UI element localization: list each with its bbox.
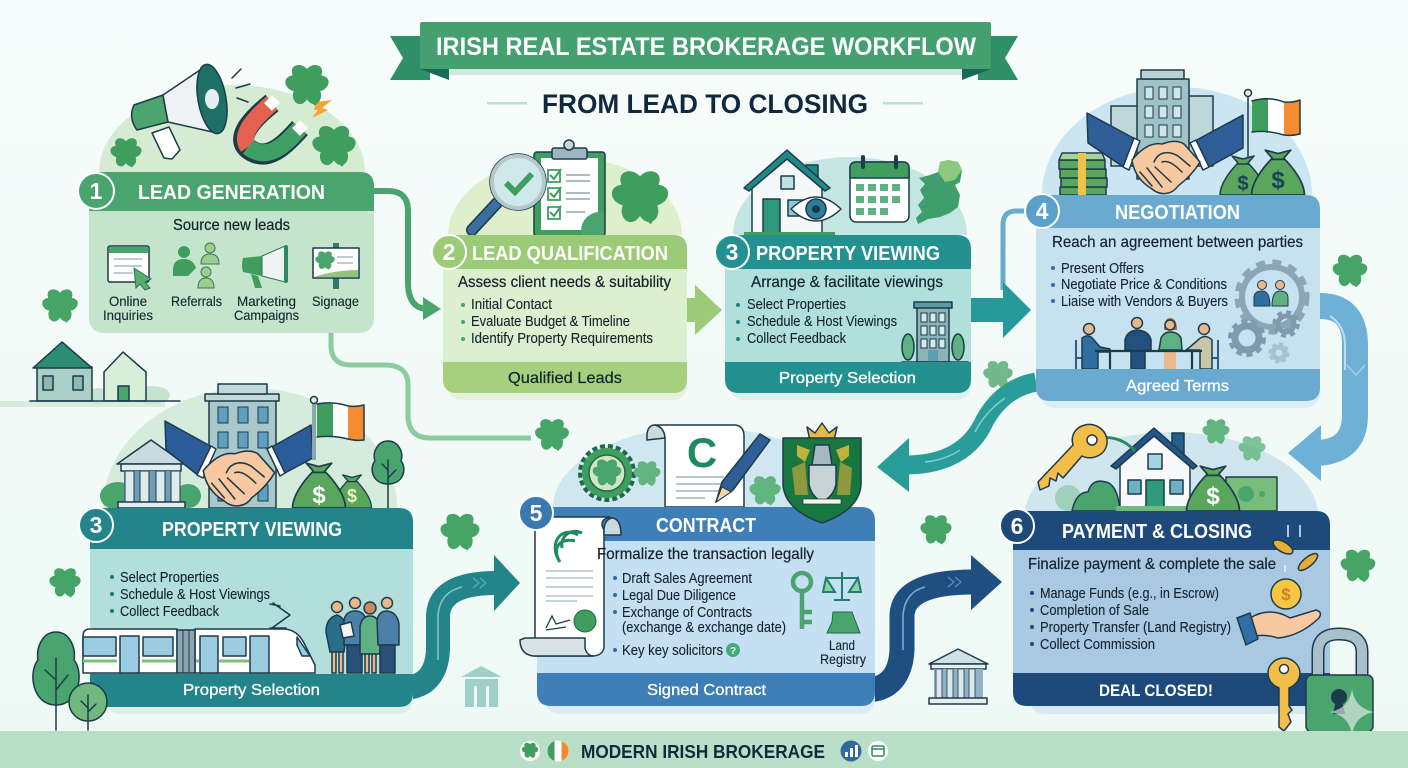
icon: signage [312, 243, 359, 309]
dome backdrop [1025, 432, 1318, 511]
icon: cash stack [1059, 153, 1107, 195]
bullet list: Collect Feedback [747, 330, 846, 347]
panel body [537, 507, 875, 706]
panel: contract [519, 423, 875, 714]
icon: group of people [326, 598, 399, 673]
panel header [1036, 195, 1320, 228]
icon: Irish flag badge [547, 740, 569, 762]
icon: crest shield with harp [783, 423, 861, 523]
arrow: property viewing to contract [405, 555, 520, 688]
icon: handshake [165, 421, 313, 506]
icon: gold key [1268, 658, 1300, 731]
icon: online inquiries [103, 246, 153, 323]
panel body [89, 172, 374, 333]
icon: land registry: Land [829, 637, 855, 653]
panel footer: Property Selection [183, 682, 320, 699]
bullet list: Negotiate Price & Conditions [1061, 276, 1227, 293]
step badge 6: 6 [1011, 513, 1023, 539]
dome backdrop [1042, 87, 1312, 195]
icon: handshake [1087, 113, 1243, 194]
footer label: MODERN IRISH BROKERAGE [581, 741, 825, 762]
icon: meeting table [1076, 318, 1218, 369]
bullet list: Identify Property Requirements [471, 330, 653, 347]
bullet list: Initial Contact [471, 296, 553, 313]
icon: courthouse [100, 440, 201, 510]
arrow: property viewing to negotiation [971, 211, 1031, 338]
panel footer [537, 673, 875, 706]
bullet list [1030, 585, 1231, 653]
bullet list: Select Properties [747, 296, 846, 313]
description: Arrange & facilitate viewings [751, 274, 943, 291]
panel footer [1036, 369, 1320, 401]
bullet list [613, 570, 786, 659]
bullet list: Legal Due Diligence [622, 587, 736, 604]
description: Assess client needs & suitability [458, 274, 671, 291]
icon: calendar [850, 157, 909, 222]
step badge 5: 5 [530, 500, 543, 526]
icon: tram [83, 603, 315, 673]
icon: shamrocks [632, 461, 782, 506]
panel body [1013, 511, 1330, 706]
panel: lead generation [78, 62, 374, 333]
panel header [1013, 511, 1330, 550]
bullet list: (exchange & exchange date) [622, 619, 786, 636]
arrow: negotiation to contract [877, 382, 1036, 492]
panel: payment and closing [1000, 419, 1374, 736]
panel body [443, 235, 687, 393]
title banner [390, 22, 1018, 80]
bullet list: Completion of Sale [1040, 602, 1149, 619]
step badge 2: 2 [443, 239, 455, 265]
panel: negotiation [1025, 70, 1320, 408]
icon: gold key with ring [1038, 424, 1135, 490]
description: Finalize payment & complete the sale [1028, 556, 1276, 573]
panel shadow [447, 250, 687, 400]
bullet list [461, 296, 653, 347]
panel body [725, 235, 971, 393]
icon: marketing campaigns: Campaigns [234, 307, 299, 323]
bullet list: Key key solicitors [622, 642, 723, 659]
icon: online inquiries: Inquiries [103, 307, 153, 323]
icon: money bags: $ [347, 486, 357, 506]
panel shadow [105, 520, 413, 714]
icon: gears with partners [1230, 262, 1307, 362]
icon: small houses [0, 342, 180, 407]
icon: Irish flag [1244, 90, 1300, 165]
icon: document with pen: C [687, 429, 717, 476]
panel header [89, 172, 374, 211]
dome backdrop [103, 388, 397, 508]
step badge 3 [79, 508, 113, 542]
panel shadow [1030, 520, 1330, 714]
icon: hand with coins [1237, 525, 1320, 645]
icon: shamrocks [1201, 419, 1267, 462]
arrow: negotiation to payment and closing [1288, 306, 1365, 481]
panel: property viewing (top) [715, 150, 971, 400]
icon: money bags: $ [1237, 173, 1249, 195]
icon: Irish flag [310, 396, 364, 460]
panel shadow [545, 520, 875, 714]
icon: calendar badge [868, 741, 888, 761]
step badge 6 [1000, 509, 1034, 543]
icon: green seal [580, 446, 634, 500]
description: Reach an agreement between parties [1052, 234, 1303, 251]
icon: signage: Signage [312, 293, 359, 309]
bullet list: Collect Feedback [120, 603, 219, 620]
step badge 4: 4 [1036, 198, 1049, 224]
icon: megaphone [132, 62, 250, 159]
panel: lead qualification [432, 140, 687, 400]
icon: land registry [820, 612, 866, 667]
step badge 3: 3 [726, 239, 738, 265]
dome backdrop [733, 157, 967, 235]
subtitle: FROM LEAD TO CLOSING [542, 89, 868, 119]
panel footer: Qualified Leads [508, 370, 622, 387]
footer bar [0, 731, 1408, 768]
step badge 4 [1025, 194, 1059, 228]
icon: referrals [171, 243, 222, 309]
step badge 2 [432, 235, 466, 269]
bullet list [736, 296, 897, 347]
panel header [90, 508, 413, 549]
bullet list: Property Transfer (Land Registry) [1040, 619, 1231, 636]
step badge 1: 1 [90, 178, 103, 204]
bullet list: Schedule & Host Viewings [747, 313, 897, 330]
icon: online inquiries: Online [109, 293, 147, 309]
panel footer [443, 362, 687, 393]
panel footer: Agreed Terms [1126, 378, 1229, 395]
icon: shamrock badge [520, 741, 540, 761]
bullet list: ? [730, 646, 736, 657]
panel: property viewing (bottom) [33, 384, 413, 730]
icon: referrals: Referrals [171, 293, 222, 309]
icon: apartment building [902, 302, 968, 362]
panel header: PAYMENT & CLOSING [1062, 521, 1252, 543]
panel header [725, 235, 971, 269]
icon: money bags [1220, 150, 1304, 195]
panel body [90, 508, 413, 707]
panel header [537, 507, 875, 541]
dome backdrop [99, 85, 365, 172]
bullet list: Manage Funds (e.g., in Escrow) [1040, 585, 1219, 602]
bullet list [1051, 260, 1228, 310]
step badge 3: 3 [90, 512, 102, 538]
panel body [1036, 195, 1320, 401]
description: Source new leads [173, 217, 290, 234]
decorative shamrocks [40, 255, 1377, 598]
icon: office building [205, 384, 279, 508]
icon: money bag and bill [1187, 466, 1277, 511]
icon: money bags: $ [312, 482, 326, 509]
panel header [443, 235, 687, 269]
icon: padlock [1306, 634, 1374, 736]
arrow: lead qualification to property viewing [687, 285, 722, 335]
dome backdrop [553, 427, 849, 507]
step badge 3 [715, 235, 749, 269]
icon: house with bushes [1055, 428, 1198, 511]
bullet list: Collect Commission [1040, 636, 1155, 653]
bullet list: Schedule & Host Viewings [120, 586, 270, 603]
bullet list [110, 569, 270, 620]
icon: scales of justice [823, 572, 861, 600]
icon: shamrocks [109, 65, 358, 168]
panel header: NEGOTIATION [1115, 202, 1240, 224]
icon: marketing campaigns [234, 245, 299, 323]
icon: city buildings [1111, 70, 1213, 179]
panel footer: Signed Contract [647, 682, 767, 699]
panel header: CONTRACT [656, 515, 756, 537]
icon: clipboard checklist [534, 140, 605, 236]
panel header: LEAD GENERATION [138, 182, 325, 204]
connector: lead generation to contract [331, 333, 531, 438]
icon: money bag and bill: $ [1206, 483, 1220, 510]
description: Formalize the transaction legally [597, 546, 814, 563]
icon: bank building [929, 649, 988, 704]
icon: land registry: Registry [820, 651, 866, 667]
icon: map of Ireland [916, 160, 962, 224]
bullet list: Present Offers [1061, 260, 1144, 277]
icon: money bags [293, 463, 372, 509]
panel header: LEAD QUALIFICATION [472, 243, 668, 265]
icon: magnet [244, 99, 332, 154]
title banner: IRISH REAL ESTATE BROKERAGE WORKFLOW [436, 33, 976, 61]
icon: magnifying glass [472, 154, 546, 230]
icon: house with eye [744, 150, 841, 235]
icon: shamrock [609, 171, 671, 225]
bullet list: Exchange of Contracts [622, 604, 752, 621]
icon: trees [33, 632, 107, 730]
arrow: contract to payment and closing [868, 555, 1002, 690]
icon: marketing campaigns: Marketing [237, 293, 296, 309]
arrow: lead generation to lead qualification [374, 191, 441, 320]
panel footer: DEAL CLOSED! [1099, 681, 1213, 700]
icon: money bags: $ [1271, 167, 1285, 194]
icon: chart badge [840, 740, 862, 762]
panel header: PROPERTY VIEWING [756, 243, 940, 265]
bullet list: Draft Sales Agreement [622, 570, 753, 587]
icon: small house outline [461, 666, 502, 707]
panel footer [90, 674, 413, 707]
bullet list: Evaluate Budget & Timeline [471, 313, 630, 330]
dome backdrop [448, 157, 682, 235]
icon: tree [372, 441, 404, 508]
panel shadow [729, 250, 971, 400]
step badge 5 [519, 496, 553, 530]
icon: legal scroll [520, 517, 621, 656]
icon: document with pen [647, 425, 770, 507]
panel shadow [1040, 210, 1320, 408]
step badge 1 [78, 173, 114, 209]
panel header: PROPERTY VIEWING [162, 519, 342, 541]
panel footer [1013, 673, 1330, 706]
icon: green key [793, 573, 812, 629]
bullet list: Liaise with Vendors & Buyers [1061, 293, 1228, 310]
bullet list: Select Properties [120, 569, 219, 586]
panel footer [725, 362, 971, 393]
panel footer: Property Selection [779, 370, 916, 387]
icon: hand with coins: $ [1281, 585, 1291, 604]
